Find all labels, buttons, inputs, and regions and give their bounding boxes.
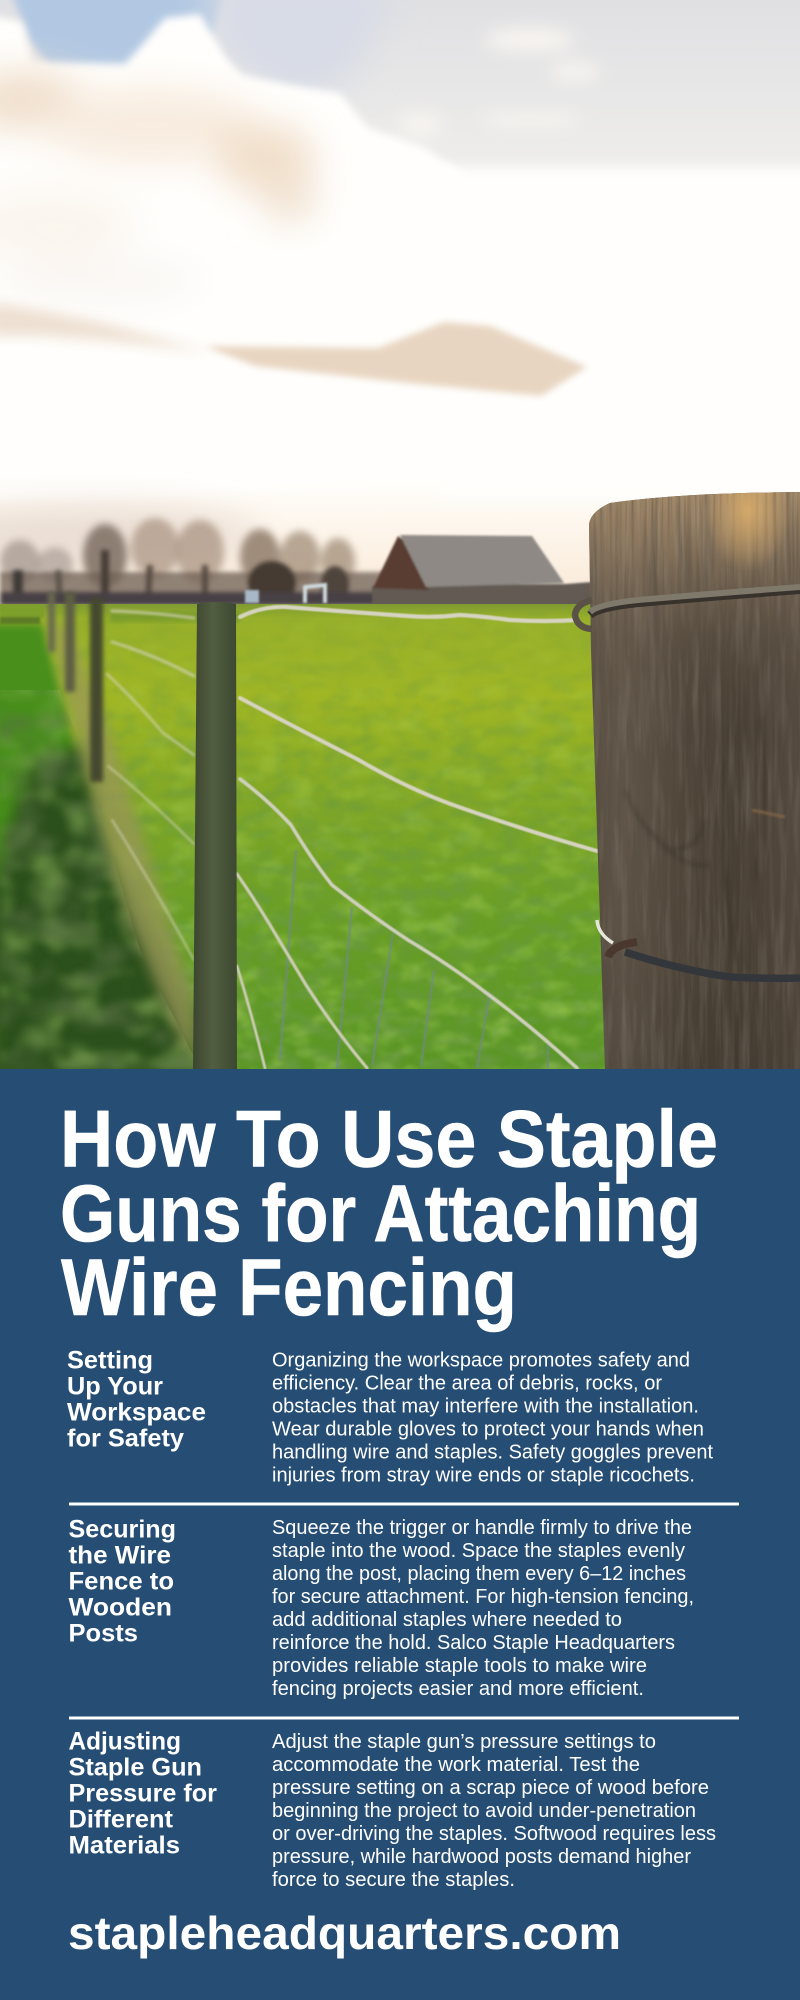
section 1 heading: Setting — [67, 1346, 153, 1374]
section 3 heading: Different — [68, 1806, 174, 1834]
lower white wire — [597, 920, 613, 943]
section 1 body: efficiency. Clear the area of debris, rocks, or — [272, 1372, 662, 1394]
verge bright patches — [0, 680, 200, 1070]
section 1 body: obstacles that may interfere with the installation. — [272, 1394, 699, 1418]
section 2 body: along the post, placing them every 6–12 inches — [272, 1562, 686, 1585]
section 3 body: pressure, while hardwood posts demand higher — [272, 1845, 691, 1868]
mesh verticals — [280, 850, 548, 1068]
barn walls — [372, 582, 592, 605]
field far shadow strip — [110, 612, 240, 622]
left grass verge — [0, 606, 200, 1085]
section 2 body: staple into the wood. Space the staples evenly — [272, 1539, 686, 1562]
section 2: securing the wire fence — [68, 1516, 694, 1700]
barn roof — [400, 535, 564, 587]
large foreground wooden post — [585, 448, 800, 1073]
verge mottling — [0, 713, 193, 1069]
section 3 body: beginning the project to avoid under-penetration — [272, 1799, 696, 1822]
section 1 body: injuries from stray wire ends or staple ricochets. — [272, 1464, 695, 1486]
section 1 heading: Up Your — [67, 1372, 163, 1400]
section 2 heading — [68, 1516, 176, 1648]
section 3 body: or over-driving the staples. Softwood requires less — [272, 1822, 716, 1845]
wood knots — [625, 720, 764, 960]
section 1 heading — [67, 1346, 206, 1452]
divider 2 — [69, 1716, 739, 1720]
tan cloud — [204, 322, 587, 396]
distant fence posts — [48, 592, 103, 782]
grass texture — [58, 632, 604, 1069]
rust streak — [752, 810, 785, 817]
wispy clouds upper right — [407, 26, 592, 132]
distant trees — [0, 518, 590, 606]
fence wires — [107, 607, 597, 1068]
section 2 body: Squeeze the trigger or handle firmly to drive the — [272, 1516, 692, 1539]
section 2 body: reinforce the hold. Salco Staple Headquarters — [272, 1631, 675, 1654]
section 2 heading: Securing — [68, 1516, 176, 1544]
section 3 heading: Staple Gun — [68, 1754, 202, 1782]
wire: fifth run — [237, 966, 265, 1068]
dry grass strip by the fence — [50, 625, 195, 1060]
section 3 body: Adjust the staple gun’s pressure settings to — [272, 1730, 656, 1753]
section 2 heading: Wooden — [68, 1594, 172, 1622]
post wires and staples — [575, 587, 800, 978]
section 2 body: provides reliable staple tools to make wire — [272, 1654, 647, 1677]
horizon haze — [0, 507, 260, 563]
panel: dark blue content — [0, 1069, 800, 2000]
barn gable — [373, 536, 428, 590]
section 3 heading: Materials — [68, 1832, 180, 1860]
section 2 body: for secure attachment. For high-tension fencing, — [272, 1585, 694, 1608]
thin fence post — [193, 602, 237, 1069]
left horizon wisp — [0, 302, 210, 352]
section 3 heading: Pressure for — [68, 1780, 217, 1808]
website footer: stapleheadquarters.com — [68, 1907, 621, 1959]
section 3: adjusting pressure — [68, 1728, 716, 1891]
section 1 body: Wear durable gloves to protect your hands when — [272, 1418, 704, 1440]
section 1 body: handling wire and staples. Safety goggles prevent — [272, 1440, 713, 1464]
staple loop top — [575, 600, 592, 629]
section 2 heading: Posts — [68, 1620, 138, 1648]
field — [0, 604, 605, 1069]
section 3 body: force to secure the staples. — [272, 1868, 515, 1891]
title: Wire Fencing — [61, 1243, 517, 1333]
wire: third run — [240, 779, 577, 1068]
section 2 body: fencing projects easier and more efficient. — [272, 1677, 644, 1700]
wires left of post — [107, 611, 194, 960]
wood grain dark — [585, 490, 800, 1070]
section 3 body — [272, 1730, 716, 1891]
verge base — [0, 620, 77, 896]
section 3 body: accommodate the work material. Test the — [272, 1753, 640, 1776]
goal post and huts — [245, 585, 325, 603]
section 1 heading: for Safety — [67, 1424, 184, 1452]
section 3 body: pressure setting on a scrap piece of wood before — [272, 1776, 709, 1799]
section 1: setting up your workspace — [67, 1346, 713, 1486]
section 2 body: add additional staples where needed to — [272, 1608, 622, 1631]
post body — [589, 492, 800, 1069]
wood grain light — [585, 490, 800, 1070]
section 1 heading: Workspace — [67, 1398, 206, 1426]
verge shadow — [0, 745, 195, 1085]
title: How To Use Staple — [60, 1094, 718, 1184]
section 1 body: Organizing the workspace promotes safety and — [272, 1348, 690, 1372]
title — [60, 1094, 718, 1333]
section 2 body — [272, 1516, 694, 1700]
staple hook bottom — [608, 942, 637, 957]
barn — [372, 535, 592, 605]
section 2 heading: Fence to — [68, 1568, 174, 1596]
wire: fourth run — [237, 874, 367, 1068]
peach cloud shading — [0, 70, 318, 300]
wire: second run — [240, 698, 597, 851]
section 3 heading: Adjusting — [68, 1728, 181, 1756]
title: Guns for Attaching — [60, 1169, 701, 1259]
section 1 body — [272, 1348, 713, 1486]
blue sky patch — [10, 0, 366, 87]
sun glare — [706, 448, 790, 572]
top wire on post — [590, 590, 800, 615]
divider 1 — [69, 1502, 739, 1506]
sky background — [0, 0, 800, 610]
white cloud mass — [0, 10, 800, 194]
lower dark wire — [625, 952, 800, 978]
section 3 heading — [68, 1728, 217, 1860]
wire: top run — [240, 607, 577, 621]
hero photo: wire fence in a field at sunset — [0, 0, 800, 1085]
warm top shading — [585, 488, 800, 1073]
verge top strip — [0, 606, 44, 618]
section 2 heading: the Wire — [68, 1542, 171, 1570]
